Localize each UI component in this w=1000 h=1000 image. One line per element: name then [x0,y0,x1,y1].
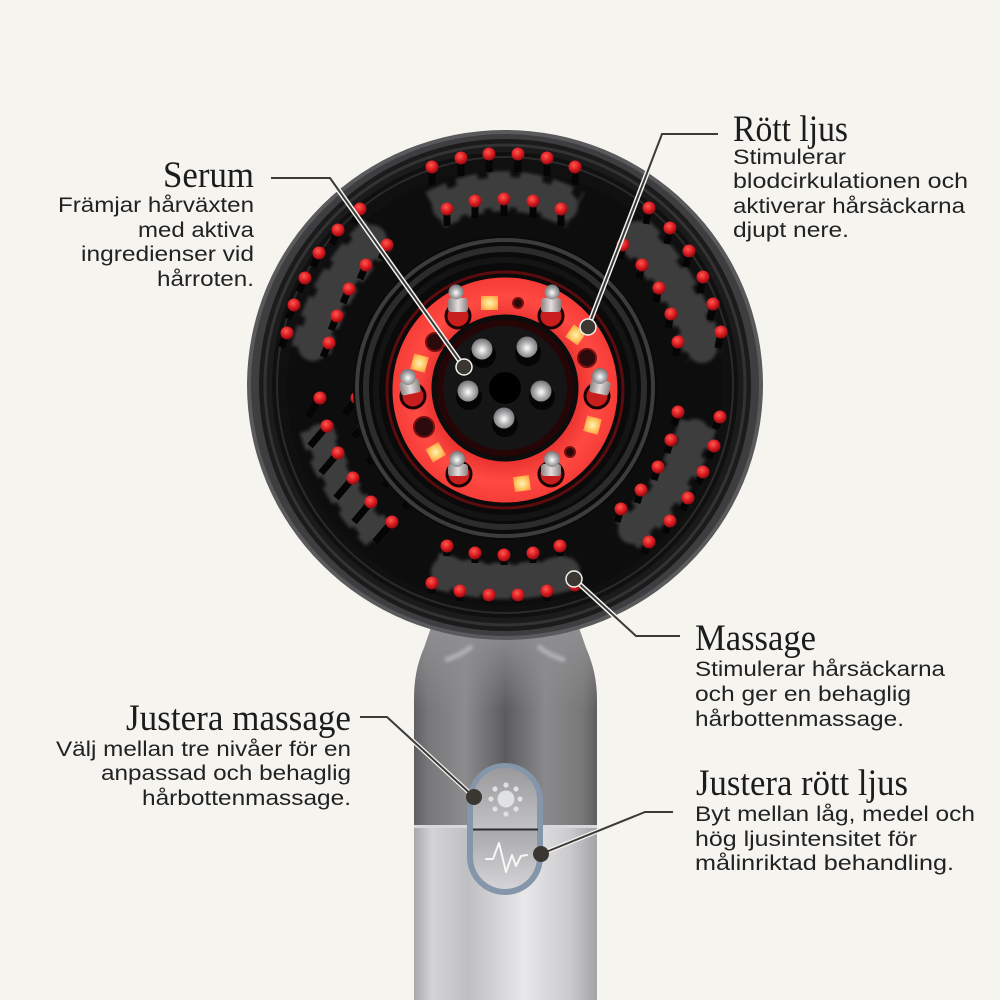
heading: Justera rött ljus: Justera rött ljus [696,763,908,804]
heading: Rött ljus: Rött ljus [733,109,848,150]
heading: Serum: Serum [163,155,254,196]
body: Massage [695,658,945,731]
text block: Massage [695,618,945,731]
text block: Rött ljus [733,109,968,242]
red pins: top brush [426,148,582,216]
body: Serum: Främjar hårväxten [58,194,254,217]
handle: lower silver section [414,826,597,1000]
body: Massage: och ger en behaglig [695,683,911,706]
button: lower [473,830,537,889]
body: Justera massage: hårbottenmassage. [142,787,351,810]
red pins: upper left brush [280,202,394,350]
body: Serum: hårroten. [157,268,254,291]
head: black body [259,139,751,631]
ring holes [414,298,596,457]
handle: upper dark grey section [414,625,597,830]
body: Serum: med aktiva [138,219,254,242]
body: Justera rött ljus: hög ljusintensitet för [695,828,917,851]
red ring inner dark edge [434,317,576,459]
icon: pulse [486,843,527,872]
inner hub [443,326,567,450]
red light ring [414,299,596,481]
body: Rött ljus: aktiverar hårsäckarna [733,195,965,218]
control buttons [467,763,543,895]
body: Massage: hårbottenmassage. [695,708,904,731]
red pins: upper right brush [616,202,728,348]
central hub rings [353,236,657,540]
brush pad: top [435,191,575,210]
body: Rött ljus: djupt nere. [733,219,849,242]
handle: shoulder light [414,625,597,710]
callout line: Rött ljus [580,134,718,335]
red pins: lower left brush [314,392,420,528]
body: Justera rött ljus: målinriktad behandling. [695,852,954,875]
body: Justera rött ljus: Byt mellan låg, medel och [695,803,975,826]
body: Rött ljus: Stimulerar [733,146,846,169]
pin stems [281,154,721,603]
body: Justera massage: anpassad och behaglig [101,762,351,785]
body: Massage: Stimulerar hårsäckarna [695,658,945,681]
brush pad: upper left [310,234,378,354]
callout line: Justera rött ljus [533,812,673,862]
LED lights [410,296,602,492]
head: outer rim [247,130,763,640]
callout line: Massage [566,571,680,636]
button capsule frame [467,763,543,895]
outer steel pins [399,284,611,486]
icon: sun [488,782,523,817]
brush pad: lower right [626,424,698,534]
center hole [489,372,521,404]
body: Rött ljus: blodcirkulationen och [733,170,968,193]
handle: seam [414,825,597,828]
handle: neck highlights [445,646,565,660]
device handle [414,625,597,1000]
inner pin shadows [456,340,555,437]
text block: Serum [58,155,254,291]
callout line: Justera massage [360,717,482,805]
text block: Justera rött ljus [695,763,975,875]
brush pad: lower left [316,428,378,534]
body: Justera rött ljus [695,803,975,875]
body: Justera massage [56,738,351,810]
body: Serum: ingredienser vid [81,243,254,266]
brush pad: bottom [434,570,577,581]
heading: Justera massage: Justera massage [126,698,351,739]
brush head [247,130,763,640]
brush pad: upper right [632,232,705,356]
button: upper [473,768,537,829]
heading: Massage: Massage [695,618,816,659]
red pins: bottom brush [426,540,582,602]
inner steel pins [458,336,552,428]
body: Justera massage: Välj mellan tre nivåer för en [56,738,351,761]
button divider [473,828,538,830]
red pins: lower right brush [614,406,726,548]
callout line: Serum [271,178,472,375]
body: Serum [58,194,254,291]
body: Rött ljus [733,146,968,242]
text block: Justera massage [56,698,351,810]
